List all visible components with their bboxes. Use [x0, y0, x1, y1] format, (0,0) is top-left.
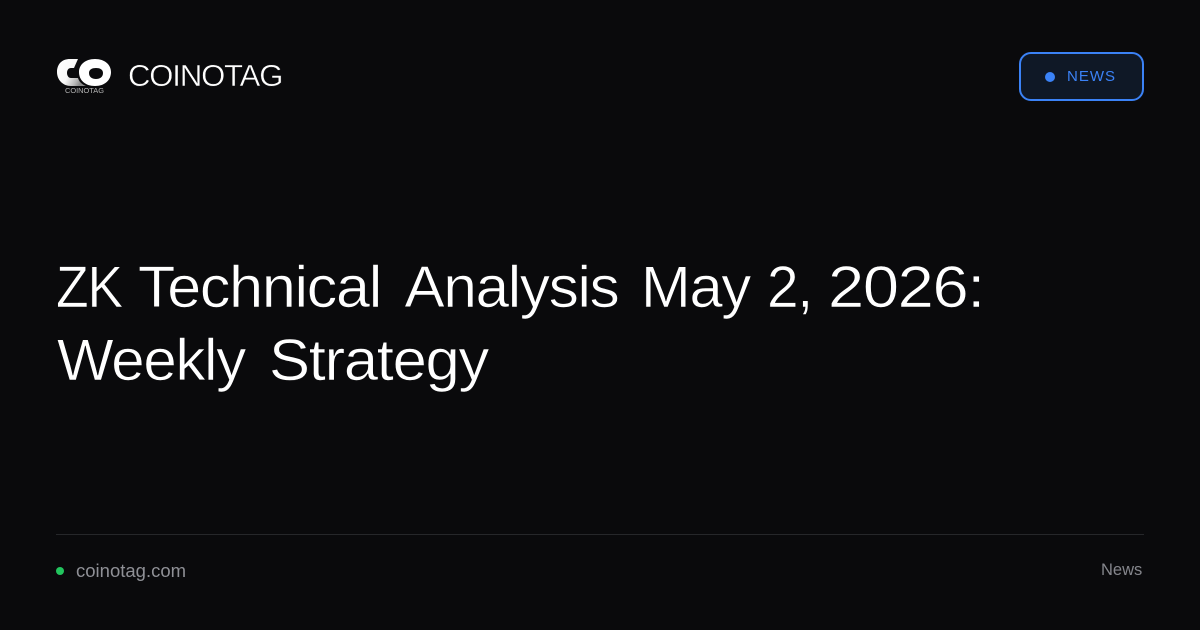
- title: Analysis: [404, 255, 618, 320]
- badge dot: [1045, 72, 1055, 82]
- news badge: [1019, 52, 1144, 101]
- title: Technical: [138, 255, 381, 320]
- footer category: News: [1101, 561, 1142, 579]
- footer divider: [56, 534, 1144, 535]
- title: 2026:: [828, 255, 984, 320]
- badge label: NEWS: [1067, 68, 1116, 85]
- icon: coinotag mark: [57, 59, 111, 95]
- title: Weekly: [57, 328, 246, 393]
- site url: coinotag.com: [76, 560, 186, 581]
- title: [56, 255, 984, 393]
- logo wordmark: COINOTAG: [128, 58, 282, 93]
- green status dot: [56, 567, 64, 575]
- footer site: [56, 560, 186, 581]
- logo: [57, 58, 282, 95]
- title: Strategy: [269, 328, 489, 393]
- icon small wordmark: COINOTAG: [65, 86, 104, 95]
- title: 2,: [767, 255, 812, 320]
- title: ZK: [56, 255, 123, 320]
- title: May: [641, 255, 751, 320]
